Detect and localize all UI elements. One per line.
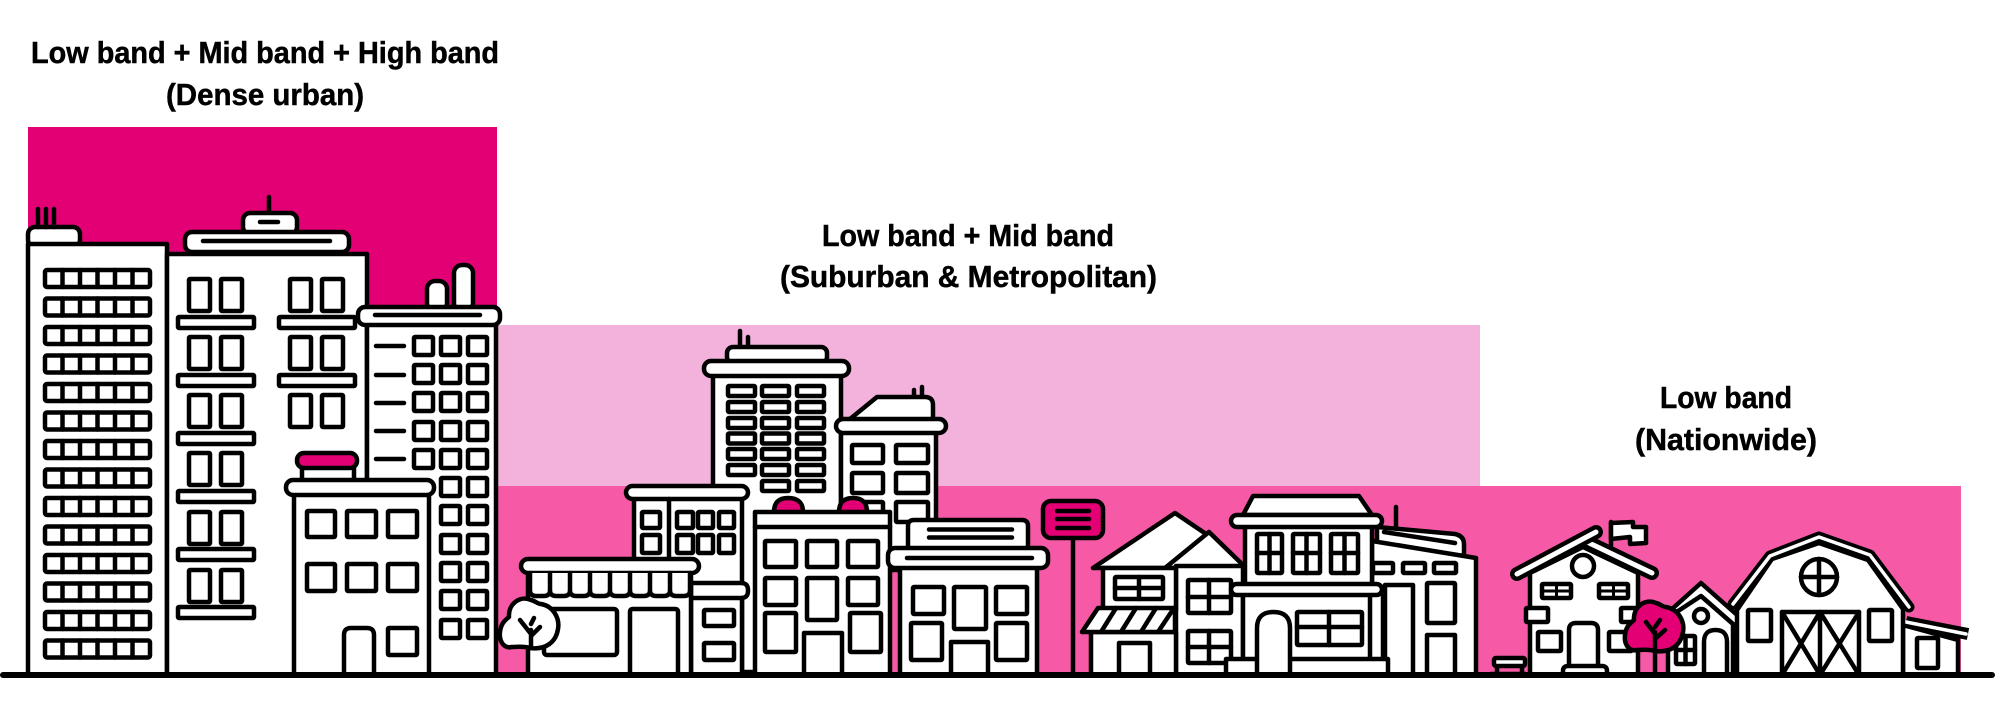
building: central block with pink domes <box>755 498 890 675</box>
house: barn <box>1733 537 1968 675</box>
heading: suburban and metropolitan: (Suburban & Metropolitan) <box>780 259 1157 294</box>
coverage band: mid band <box>497 325 1480 486</box>
bench <box>1491 658 1525 674</box>
heading: nationwide: (Nationwide) <box>1635 422 1817 457</box>
ground line <box>3 672 1992 678</box>
house: gabled house with awning <box>1082 513 1243 675</box>
heading: dense urban <box>31 35 499 112</box>
building: corner shop <box>521 559 699 675</box>
heading: suburban and metropolitan <box>780 218 1157 294</box>
building: balcony apartments <box>167 197 367 675</box>
heading: dense urban: Low band + Mid band + High band <box>31 35 499 70</box>
house: wide roof side building <box>1372 507 1476 675</box>
building: angled roof mid-rise <box>836 387 946 570</box>
coverage band: high band <box>28 127 497 427</box>
building: narrow tower with square windows <box>358 265 500 675</box>
tree: pink <box>1625 602 1683 675</box>
house: small cottage <box>1668 583 1745 675</box>
building: low front block <box>286 453 434 675</box>
tree: white <box>500 599 558 648</box>
house: farmhouse with flag <box>1517 522 1652 675</box>
building: back block <box>626 486 748 675</box>
coverage band: low band <box>497 486 1961 676</box>
icon: pink street sign <box>1043 501 1103 675</box>
heading: nationwide <box>1635 380 1817 457</box>
building: left tower <box>28 209 167 675</box>
building: tall mid-rise <box>704 331 849 672</box>
building: right storefront <box>888 520 1048 675</box>
heading: nationwide: Low band <box>1660 380 1792 415</box>
heading: dense urban: (Dense urban) <box>166 77 364 112</box>
house: two storey town house <box>1226 496 1388 675</box>
heading: suburban and metropolitan: Low band + Mid band <box>822 218 1114 253</box>
